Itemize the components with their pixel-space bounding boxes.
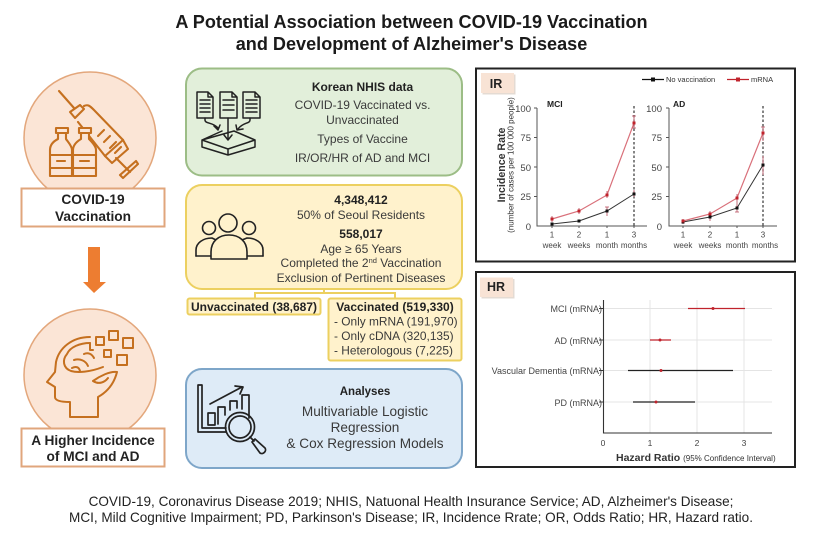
title [175,12,648,54]
box: vaccinated group: Vaccinated (519,330) [336,300,454,314]
text: population counts [277,193,445,285]
line chart: MCI: week [542,241,562,250]
label: COVID-19 Vaccination: Vaccination [55,209,131,224]
text: NHIS data contents: COVID-19 Vaccinated vs. [295,98,430,112]
icon: head with dissolving brain [24,309,156,441]
box: vaccinated group [328,298,462,360]
arrow: vaccination to incidence [83,247,106,293]
line chart: MCI: 1 [605,230,610,240]
footnote: abbreviations: MCI, Mild Cognitive Impairment; PD, Parkinson's Disease; IR, Incidence Rrate; OR, Odds Ratio; HR, Hazard ratio. [69,510,753,525]
text: NHIS data contents [295,80,430,165]
text: analyses methods: Analyses [340,386,390,398]
forest plot: MCI (mRNA) [550,304,602,314]
line chart: AD [646,99,778,250]
text: population counts: 50% of Seoul Residents [297,208,425,222]
title: and Development of Alzheimer's Disease [236,34,587,54]
label: A Higher Incidence of MCI and AD [22,428,164,466]
label: COVID-19 Vaccination [22,188,164,226]
footnote: abbreviations [69,494,753,525]
box: vaccinated group: - Only mRNA (191,970) [334,314,458,328]
text: population counts: Completed the 2 [281,256,369,270]
line chart: AD: 25 [651,192,662,203]
text: NHIS data contents: Types of Vaccine [317,132,408,146]
text: analyses methods: Multivariable Logistic [302,404,428,419]
line chart: AD: weeks [698,241,721,250]
forest plot: PD (mRNA) [554,398,602,408]
line chart: AD: 0 [657,222,662,233]
line chart: AD: AD [673,99,685,109]
line chart: AD: 1 [681,230,686,240]
panel: IR charts [476,68,795,262]
forest plot: 0 [601,438,606,448]
forest plot: AD (mRNA) [554,336,602,346]
box: vaccinated group: - Heterologous (7,225) [334,344,453,358]
line chart: MCI: 100 [515,104,531,115]
legend: No vaccination [666,75,715,84]
line chart: MCI: MCI [547,99,563,109]
forest plot: Vascular Dementia (mRNA) [492,366,602,376]
text: NHIS data contents: Korean NHIS data [312,80,414,94]
forest plot: 2 [695,438,700,448]
heading: IR: IR [490,77,502,91]
text: population counts: Exclusion of Pertinent Diseases [277,271,445,285]
forest plot: Hazard Ratio (95% Confidence Interval) [616,452,776,464]
box: unvaccinated group: Unvaccinated (38,687) [191,300,317,314]
icon: syringe and vials [24,72,156,204]
line chart: MCI: weeks [567,241,590,250]
line chart: AD: 2 [708,230,713,240]
forest plot: 3 [742,438,747,448]
panel: study population [186,185,462,289]
panel: Korean NHIS data [186,68,462,176]
text: population counts: 558,017 [339,227,383,241]
line chart: AD: 100 [646,104,662,115]
text: analyses methods [286,386,444,451]
line chart: MCI [515,99,647,250]
panel: COVID-19 vaccination [22,72,164,226]
line chart: AD: week [673,241,693,250]
line chart: AD: month [726,241,748,250]
line chart: MCI: 0 [526,222,531,233]
heading: IR [481,73,516,94]
text: population counts: 4,348,412 [334,193,388,207]
line chart: MCI: 75 [520,133,531,144]
y axis title [496,97,516,233]
panel: HR forest plot [476,272,795,467]
line chart: AD: 50 [651,163,662,174]
label: A Higher Incidence of MCI and AD: of MCI and AD [46,449,140,464]
line chart: MCI: 25 [520,192,531,203]
line chart: MCI: 2 [577,230,582,240]
title: A Potential Association between COVID-19 Vaccination [175,12,648,32]
text: population counts: Age ≥ 65 Years [320,242,402,256]
line chart: MCI: 1 [550,230,555,240]
forest plot [492,300,776,464]
text: NHIS data contents: Unvaccinated [326,113,399,127]
label: COVID-19 Vaccination: COVID-19 [61,192,125,207]
footnote: abbreviations: COVID-19, Coronavirus Disease 2019; NHIS, Natuonal Health Insurance Service; AD, Alzheimer's Disease; [89,494,733,509]
panel: higher incidence [22,309,164,466]
icon: group of people [196,214,263,259]
line chart: MCI: month [596,241,618,250]
forest plot: 1 [648,438,653,448]
text: NHIS data contents: IR/OR/HR of AD and MCI [295,151,430,165]
panel: analyses [186,369,462,468]
y axis title: (number of cases per 100 000 people) [506,97,516,233]
text: population counts: Vaccination [377,256,441,270]
connector: population to groups [255,289,395,298]
icon: bar chart with magnifier [198,385,266,454]
legend: mRNA [751,75,773,84]
label: A Higher Incidence of MCI and AD: A Higher Incidence [31,433,155,448]
heading: HR [480,278,514,298]
icon: documents into database [197,92,260,155]
line chart: MCI: 3 [632,230,637,240]
legend [642,75,773,84]
text: population counts: nd [369,256,377,265]
text: analyses methods: Regression [331,420,399,435]
text: analyses methods: & Cox Regression Models [286,436,444,451]
line chart: MCI: months [621,241,647,250]
line chart: AD: months [752,241,778,250]
line chart: AD: 75 [651,133,662,144]
heading: HR: HR [487,280,505,294]
box: vaccinated group: - Only cDNA (320,135) [334,329,454,343]
line chart: AD: 1 [735,230,740,240]
line chart: AD: 3 [761,230,766,240]
y axis title: Incidence Rate [496,128,508,202]
line chart: MCI: 50 [520,163,531,174]
